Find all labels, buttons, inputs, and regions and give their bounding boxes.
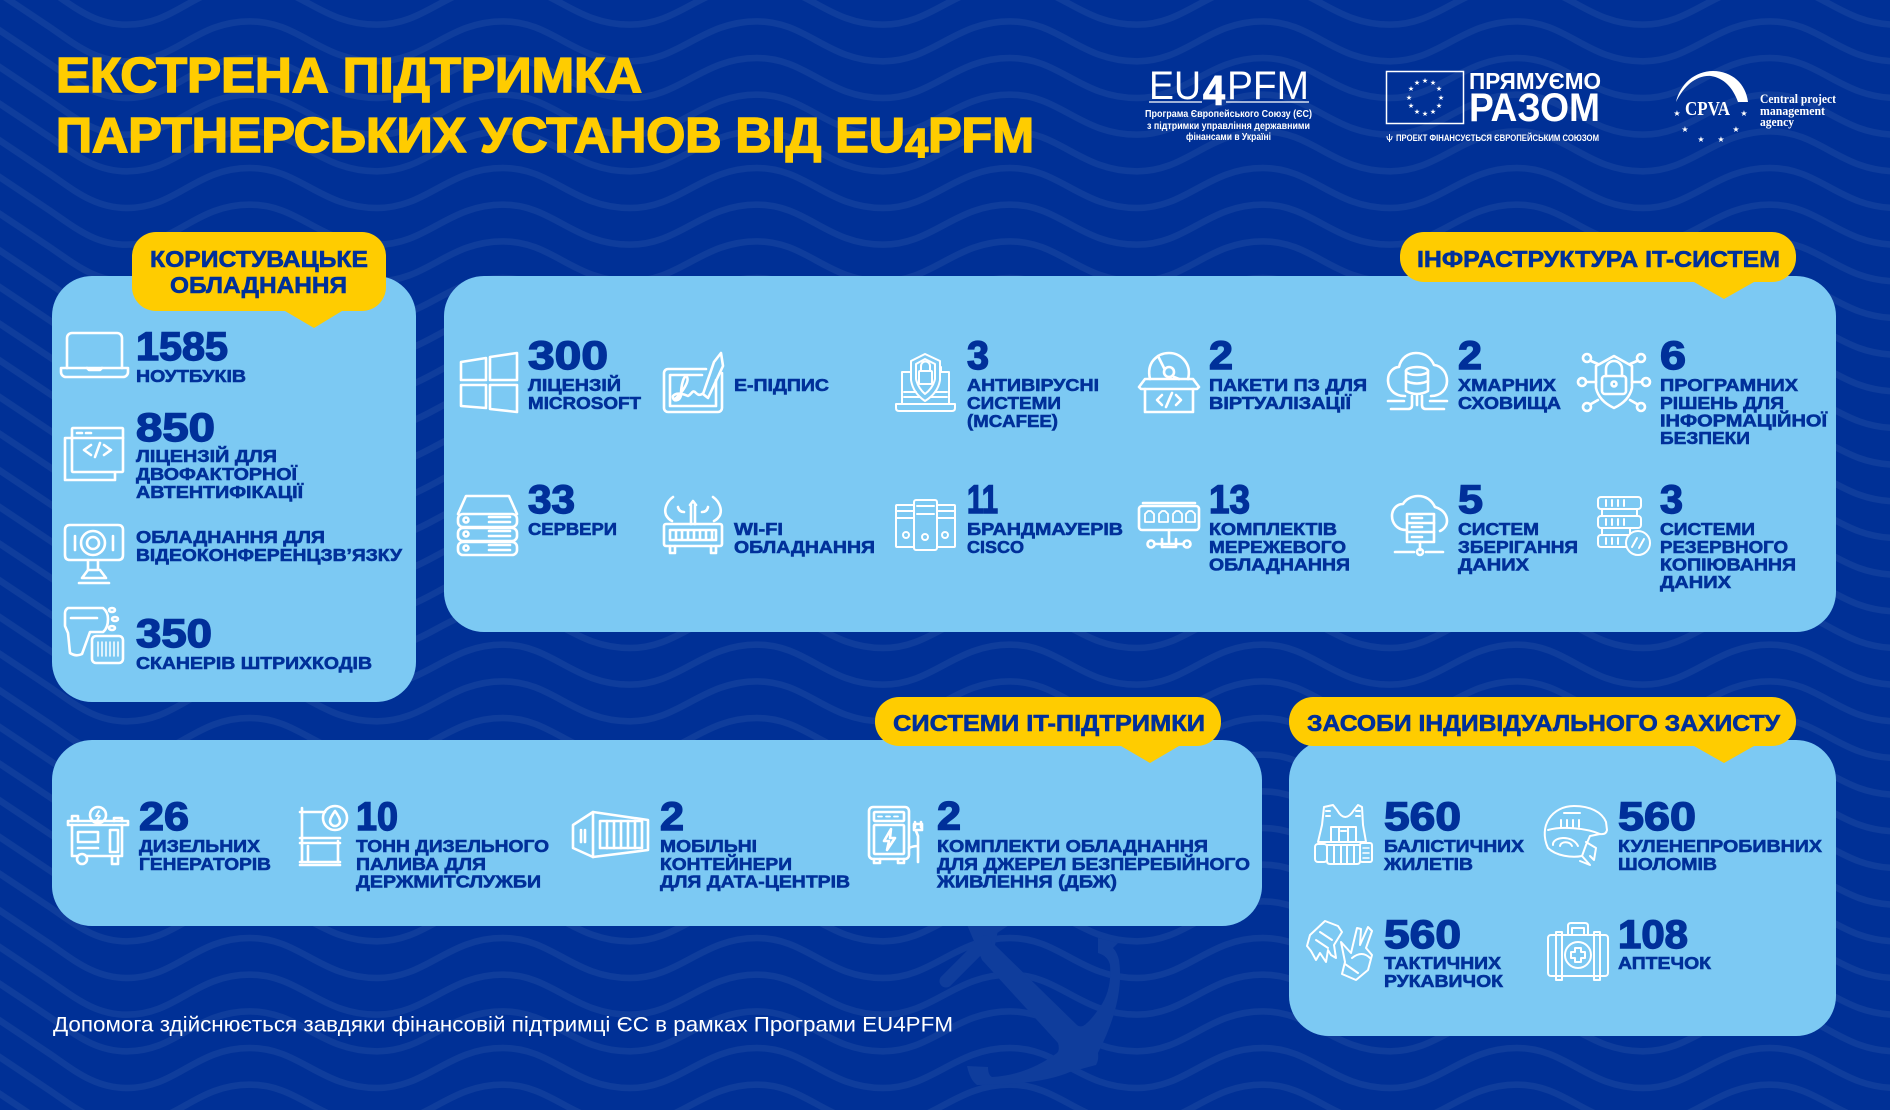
item: first-aid kits (1548, 913, 1711, 980)
logo: CPVA: ★ (1697, 135, 1705, 144)
title: ПАРТНЕРСЬКИХ УСТАНОВ ВІД EU (56, 108, 894, 163)
label: diesel generators (139, 836, 271, 874)
number: 1585: 1585 (136, 325, 228, 369)
label: network equipment: КОМПЛЕКТІВ (1209, 519, 1337, 539)
icon: first-aid kit (1548, 923, 1608, 980)
item: bulletproof helmets (1545, 795, 1822, 874)
item: backup systems (1598, 478, 1796, 592)
logo: CPVA: Central project (1760, 92, 1837, 106)
tag: IT support heading: СИСТЕМИ IT-ПІДТРИМКИ (893, 710, 1205, 736)
logo: EU4PFM (1145, 64, 1312, 143)
tag: IT infrastructure heading: ІНФРАСТРУКТУРА IT-СИСТЕМ (1417, 246, 1780, 272)
label: mobile data-centre containers: ДЛЯ ДАТА-ЦЕНТРІВ (660, 872, 850, 892)
icon: webcam (65, 525, 123, 583)
logo: EU4PFM: Програма Європейського Союзу (ЄС) (1145, 108, 1312, 120)
label: bulletproof helmets: ШОЛОМІВ (1618, 854, 1717, 874)
logo: CPVA: ★ (1717, 135, 1725, 144)
logo: CPVA: ★ (1681, 125, 1689, 134)
item: videoconference equipment (65, 525, 403, 583)
item: barcode scanners (65, 608, 372, 673)
item: diesel generators (68, 795, 271, 874)
number: 5: 5 (1458, 478, 1483, 522)
title (56, 48, 1034, 166)
logo: EU flag, Прямуємо разом: ★ (1408, 102, 1414, 110)
label: diesel generators: ДИЗЕЛЬНИХ (139, 836, 260, 856)
item: two-factor licences (65, 406, 304, 502)
item: Wi-Fi equipment (664, 497, 875, 557)
number: 2: 2 (1209, 334, 1233, 378)
tag: personal protection heading: ЗАСОБИ ІНДИВІДУАЛЬНОГО ЗАХИСТУ (1307, 710, 1780, 736)
label: data storage systems: ДАНИХ (1458, 554, 1529, 574)
label: tactical gloves (1384, 953, 1503, 991)
label: network equipment: ОБЛАДНАННЯ (1209, 554, 1350, 574)
tag: IT infrastructure heading (1400, 232, 1796, 299)
label: antivirus systems: СИСТЕМИ (967, 393, 1061, 413)
label: information security software (1660, 375, 1828, 448)
label: mobile data-centre containers (660, 836, 850, 892)
label: bulletproof helmets: КУЛЕНЕПРОБИВНИХ (1618, 836, 1822, 856)
icon: ballistic vest (1315, 805, 1372, 864)
footer note: Допомога здійснюється завдяки фінансовій підтримці ЄС в рамках Програми EU4PFM (53, 1014, 953, 1036)
label: UPS equipment: ДЛЯ ДЖЕРЕЛ БЕЗПЕРЕБІЙНОГО (937, 853, 1250, 874)
item: Microsoft licences (461, 334, 641, 413)
icon: generator (68, 807, 128, 864)
label: data storage systems: СИСТЕМ (1458, 519, 1539, 539)
icon: network switch (1139, 503, 1199, 548)
icon: cloud server (1392, 496, 1447, 555)
label: videoconference equipment: ОБЛАДНАННЯ ДЛЯ (136, 527, 325, 547)
icon: backup server (1598, 497, 1650, 555)
logo: EU flag, Прямуємо разом: ★ (1430, 79, 1436, 87)
label: information security software: ПРОГРАМНИХ (1660, 375, 1798, 395)
label: cloud storage (1458, 375, 1561, 413)
label: two-factor licences: ЛІЦЕНЗІЙ ДЛЯ (136, 445, 277, 466)
logo: EU flag, Прямуємо разом (1386, 68, 1601, 144)
label: UPS equipment: ЖИВЛЕННЯ (ДБЖ) (936, 872, 1117, 892)
number: 560: 560 (1384, 795, 1461, 839)
label: data storage systems (1458, 519, 1578, 574)
number: 26: 26 (139, 795, 189, 839)
logo: EU flag, Прямуємо разом: ★ (1438, 94, 1444, 102)
icon: UPS unit (869, 807, 922, 863)
logo: CPVA: ★ (1740, 109, 1748, 118)
logo: CPVA: CPVA (1685, 98, 1730, 120)
number: 560: 560 (1384, 913, 1461, 957)
panel: user equipment (52, 232, 416, 702)
label: ballistic vests (1383, 836, 1524, 874)
logo: EU flag, Прямуємо разом: ★ (1436, 102, 1442, 110)
logo: EU flag, Прямуємо разом: ★ (1436, 85, 1442, 93)
number: 850: 850 (136, 406, 215, 450)
logo: EU flag, Прямуємо разом: ★ (1414, 108, 1420, 116)
label: backup systems: ДАНИХ (1660, 572, 1731, 592)
icon: cloud database (1388, 353, 1447, 409)
item: network equipment (1139, 478, 1350, 574)
number: 10: 10 (356, 795, 398, 839)
label: backup systems: РЕЗЕРВНОГО (1660, 537, 1788, 557)
icon: software box (1139, 353, 1199, 412)
icon: wi-fi router (664, 497, 722, 553)
item: cloud storage (1388, 334, 1561, 413)
tag: user equipment heading: КОРИСТУВАЦЬКЕ (150, 246, 368, 272)
logo: EU flag, Прямуємо разом: ★ (1406, 94, 1412, 102)
icon: firewall towers (896, 500, 955, 550)
label: diesel fuel: ТОНН ДИЗЕЛЬНОГО (356, 836, 549, 856)
logo: EU flag, Прямуємо разом: ★ (1414, 79, 1420, 87)
label: virtualization software: ВІРТУАЛІЗАЦІЇ (1209, 393, 1352, 413)
label: tactical gloves: ТАКТИЧНИХ (1384, 953, 1501, 973)
item: diesel fuel (300, 795, 549, 892)
number: 11: 11 (967, 478, 998, 522)
item: information security software (1578, 334, 1828, 448)
label: Wi-Fi equipment: ОБЛАДНАННЯ (734, 537, 875, 557)
number: 6: 6 (1660, 334, 1686, 378)
label: two-factor licences: ДВОФАКТОРНОЇ (136, 464, 298, 484)
number: 2: 2 (660, 795, 684, 839)
label: two-factor licences (136, 445, 304, 502)
icon: server stack (458, 496, 517, 555)
label: diesel fuel (356, 836, 549, 892)
number: 33: 33 (528, 478, 575, 522)
label: ballistic vests: ЖИЛЕТІВ (1383, 854, 1473, 874)
number: 560: 560 (1618, 795, 1696, 839)
logo: CPVA: ★ (1673, 109, 1681, 118)
label: tactical gloves: РУКАВИЧОК (1384, 971, 1503, 991)
panel: personal protective equipment (1289, 697, 1836, 1036)
label: information security software: ІНФОРМАЦІЙНОЇ (1660, 410, 1828, 430)
item: antivirus systems (896, 334, 1099, 431)
item: mobile data-centre containers (573, 795, 850, 892)
panel: IT support systems (52, 697, 1262, 926)
logo: CPVA: agency (1760, 115, 1795, 129)
label: cloud storage: СХОВИЩА (1458, 393, 1561, 413)
logo: EU flag, Прямуємо разом: ПРОЕКТ ФІНАНСУЄТЬСЯ ЄВРОПЕЙСЬКИМ СОЮЗОМ (1396, 132, 1599, 144)
number: 3: 3 (1660, 478, 1683, 522)
icon: helmet (1545, 806, 1607, 865)
icon: shield laptop (896, 354, 955, 411)
item: Cisco firewalls (896, 478, 1123, 557)
logo: EU flag, Прямуємо разом: ★ (1408, 85, 1414, 93)
label: UPS equipment: КОМПЛЕКТИ ОБЛАДНАННЯ (937, 836, 1208, 856)
item: UPS equipment (869, 794, 1250, 892)
label: virtualization software (1209, 375, 1367, 413)
label: Cisco firewalls: БРАНДМАУЕРІВ (967, 519, 1123, 539)
label: diesel generators: ГЕНЕРАТОРІВ (139, 854, 271, 874)
label: virtualization software: ПАКЕТИ ПЗ ДЛЯ (1209, 375, 1367, 395)
panel: IT infrastructure (444, 232, 1836, 632)
tag: personal protection heading (1289, 697, 1796, 763)
label: first-aid kits: АПТЕЧОК (1618, 953, 1711, 973)
logo: EU4PFM: з підтримки управління державними (1147, 120, 1310, 132)
label: servers: СЕРВЕРИ (528, 519, 617, 539)
icon: code window (65, 428, 123, 480)
label: Microsoft licences (528, 374, 641, 413)
label: Microsoft licences: MICROSOFT (528, 393, 641, 413)
item: tactical gloves (1307, 913, 1503, 991)
logo: EU4PFM: 4 (1203, 67, 1226, 114)
label: videoconference equipment: ВІДЕОКОНФЕРЕНЦЗВ’ЯЗКУ (136, 545, 403, 565)
label: diesel fuel: ПАЛИВА ДЛЯ (356, 854, 486, 874)
item: virtualization software (1139, 334, 1367, 413)
label: videoconference equipment (136, 527, 403, 565)
label: diesel fuel: ДЕРЖМИТСЛУЖБИ (356, 872, 541, 892)
label: backup systems (1660, 519, 1796, 592)
label: barcode scanners: СКАНЕРІВ ШТРИХКОДІВ (136, 653, 372, 673)
logo: EU flag, Прямуємо разом: ★ (1422, 110, 1428, 118)
logo: EU4PFM: PFM (1227, 64, 1309, 108)
label: Wi-Fi equipment (734, 519, 875, 557)
item: laptops (61, 325, 246, 386)
label: ballistic vests: БАЛІСТИЧНИХ (1384, 836, 1524, 856)
label: cloud storage: ХМАРНИХ (1458, 375, 1556, 395)
label: antivirus systems (967, 375, 1099, 431)
icon: windows logo (461, 353, 517, 412)
logo: EU flag, Прямуємо разом: ПРЯМУЄМО (1469, 68, 1601, 94)
label: data storage systems: ЗБЕРІГАННЯ (1458, 537, 1578, 557)
item: servers (458, 478, 617, 555)
label: network equipment: МЕРЕЖЕВОГО (1209, 537, 1346, 557)
icon: fuel barrel (300, 806, 347, 865)
logo: CPVA (1673, 71, 1837, 144)
number: 3: 3 (967, 334, 989, 378)
label: Microsoft licences: ЛІЦЕНЗІЙ (528, 374, 621, 395)
number: 2: 2 (1458, 334, 1482, 378)
label: Cisco firewalls: CISCO (967, 537, 1024, 557)
logo: EU flag, Прямуємо разом: ★ (1422, 77, 1428, 85)
logo: CPVA: ★ (1732, 125, 1740, 134)
logo: CPVA: management (1760, 104, 1826, 118)
label: two-factor licences: АВТЕНТИФІКАЦІЇ (136, 482, 304, 502)
logo: EU flag, Прямуємо разом: ★ (1430, 108, 1436, 116)
icon: shipping container (573, 812, 648, 857)
number: 300: 300 (528, 334, 608, 378)
label: backup systems: СИСТЕМИ (1660, 519, 1755, 539)
label: mobile data-centre containers: МОБІЛЬНІ (660, 836, 757, 856)
label: UPS equipment (936, 836, 1250, 892)
label: laptops: НОУТБУКІВ (136, 366, 246, 386)
label: network equipment (1209, 519, 1350, 574)
label: bulletproof helmets (1618, 836, 1822, 874)
label: antivirus systems: (MCAFEE) (967, 411, 1058, 431)
logo: EU4PFM: EU (1149, 64, 1201, 108)
number: 13: 13 (1209, 478, 1250, 522)
item: data storage systems (1392, 478, 1578, 574)
tag: user equipment heading (132, 232, 386, 328)
number: 2: 2 (937, 794, 961, 838)
item: ballistic vests (1315, 795, 1524, 874)
item: e-signature (664, 353, 829, 412)
tag: user equipment heading: ОБЛАДНАННЯ (170, 272, 347, 298)
label: information security software: БЕЗПЕКИ (1660, 428, 1750, 448)
background anchor (946, 920, 1120, 1085)
label: information security software: РІШЕНЬ ДЛЯ (1660, 393, 1784, 413)
icon: laptop (61, 333, 128, 377)
label: e-signature: Е-ПІДПИС (734, 375, 829, 395)
title: PFM (928, 108, 1034, 163)
logo: EU4PFM: фінансами в Україні (1186, 131, 1271, 143)
icon: signature tablet (664, 353, 723, 412)
icon: barcode scanner (65, 608, 123, 663)
logo: EU flag, Прямуємо разом: РАЗОМ (1469, 86, 1600, 130)
icon: shield with padlock (1578, 354, 1650, 411)
label: antivirus systems: АНТИВІРУСНІ (967, 375, 1099, 395)
number: 350: 350 (136, 612, 212, 656)
label: Wi-Fi equipment: WI-FI (734, 519, 783, 539)
title: 4 (905, 120, 928, 166)
number: 108: 108 (1618, 913, 1688, 957)
label: mobile data-centre containers: КОНТЕЙНЕРИ (660, 853, 792, 874)
label: Cisco firewalls (967, 519, 1123, 557)
label: backup systems: КОПІЮВАННЯ (1660, 554, 1796, 574)
title: ЕКСТРЕНА ПІДТРИМКА (56, 48, 642, 103)
tag: IT support heading (875, 697, 1221, 763)
icon: tactical gloves (1307, 921, 1372, 980)
